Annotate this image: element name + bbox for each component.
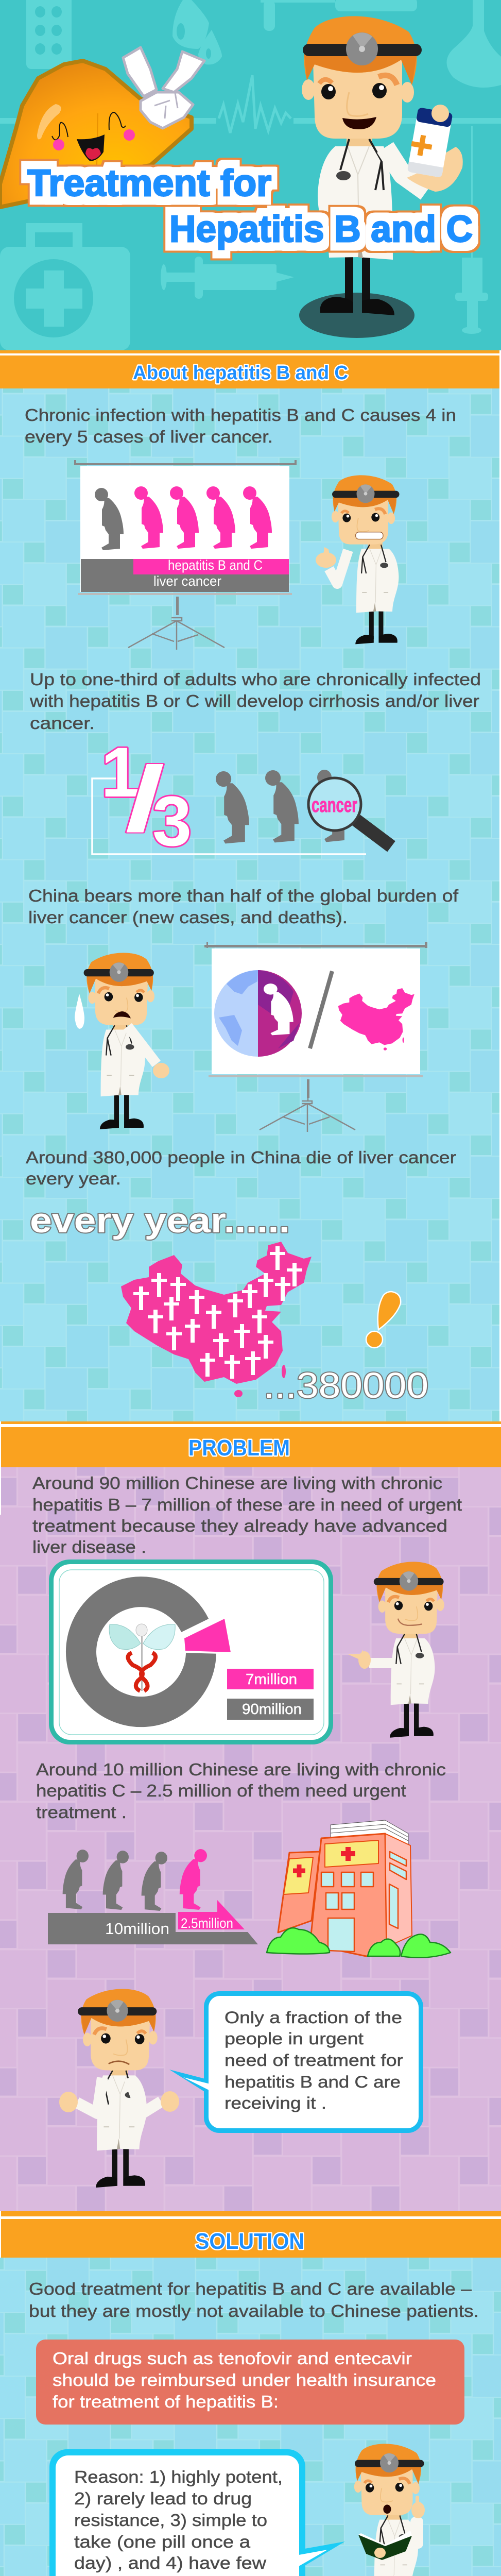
text block: hepatitis B burden: liver disease . xyxy=(32,1537,146,1556)
callout: only a fraction: hepatitis B and C are xyxy=(224,2073,401,2091)
text block: global burden: liver cancer (new cases, and deaths). xyxy=(28,908,348,927)
text block: global burden xyxy=(28,886,459,927)
chart: donut 7 million of 90 million: 90million xyxy=(242,1701,302,1718)
icon: hospital xyxy=(267,1820,451,1958)
callout: only a fraction xyxy=(169,1991,423,2133)
panel: problem xyxy=(0,1467,501,2211)
icon: caduceus xyxy=(109,1624,175,1691)
fraction one third: / xyxy=(125,748,165,850)
text block: hepatitis B burden: hepatitis B – 7 million of these are in need of urgent xyxy=(32,1495,462,1514)
icon: magnifier cancer: cancer xyxy=(312,794,357,817)
map: China with crosses xyxy=(121,1242,312,1397)
heading: About hepatitis B and C xyxy=(0,350,499,388)
text block: 4 in 5 cases: every 5 cases of liver cancer. xyxy=(25,427,273,446)
callout: reasons hepatitis B: 2) rarely lead to drug xyxy=(74,2489,252,2508)
text block: hepatitis C burden: treatment . xyxy=(36,1803,127,1822)
heading: SOLUTION xyxy=(1,2211,501,2258)
text block: one-third of adults: with hepatitis B or C will develop cirrhosis and/or liver xyxy=(29,691,479,710)
fraction one third: 3 xyxy=(152,782,192,861)
text block: one-third of adults: Up to one-third of adults who are chronically infected xyxy=(30,670,481,689)
heading: PROBLEM xyxy=(0,1421,501,1515)
chart: donut 7 million of 90 million: 7million xyxy=(246,1671,297,1688)
callout: reasons hepatitis B: resistance, 3) simple to xyxy=(74,2511,267,2530)
callout: reasons hepatitis B: take (one pill once a xyxy=(74,2532,251,2551)
icon: doctor with thumb up xyxy=(316,475,400,644)
text block: good treatment xyxy=(29,2279,479,2320)
callout: only a fraction: receiving it . xyxy=(224,2094,326,2112)
label: 380000: ...380000 xyxy=(264,1365,428,1405)
callout: reasons hepatitis B: Reason: 1) highly potent, xyxy=(74,2467,283,2486)
text block: global burden: China bears more than half of the global burden of xyxy=(28,886,459,905)
panel: solution xyxy=(0,2258,501,2576)
icon: victory glove xyxy=(123,47,204,128)
title xyxy=(27,163,473,250)
icon: globe half purple xyxy=(214,970,302,1057)
text block: hepatitis B burden: treatment because they already have advanced xyxy=(32,1516,447,1535)
callout: only a fraction: need of treatment for xyxy=(224,2051,403,2070)
icon: pointing doctor xyxy=(348,1562,444,1738)
chart: 10 million and 2.5 million xyxy=(48,1849,258,1944)
callout: reasons hepatitis B: day) , and 4) have few xyxy=(74,2553,266,2572)
text block: one-third of adults xyxy=(29,670,481,733)
callout: oral drugs: Oral drugs such as tenofovir and entecavir xyxy=(53,2349,412,2368)
callout: only a fraction: people in urgent xyxy=(224,2029,364,2048)
title: Treatment for xyxy=(27,163,271,204)
text block: hepatitis C burden: Around 10 million Chinese are living with chronic xyxy=(36,1760,446,1779)
chart: projection screen 4 in 5: liver cancer xyxy=(153,573,221,589)
text block: 380,000 deaths: every year. xyxy=(26,1169,121,1188)
chart: one third with magnifier xyxy=(92,733,391,861)
heading: PROBLEM: PROBLEM xyxy=(188,1435,290,1461)
fraction one third: 1 xyxy=(101,733,140,812)
chart: 10 million and 2.5 million: 2.5million xyxy=(181,1916,233,1931)
icon: smiling liver xyxy=(0,47,204,207)
chart: projection screen 4 in 5: hepatitis B and C xyxy=(168,557,263,573)
callout: oral drugs: should be reimbursed under health insurance xyxy=(53,2370,436,2389)
title: Hepatitis B and C xyxy=(169,209,473,250)
background medical icons xyxy=(0,0,501,350)
text block: hepatitis C burden: hepatitis C – 2.5 million of them need urgent xyxy=(36,1781,406,1800)
chart: projection screen 4 in 5 xyxy=(74,460,297,650)
panel: about hepatitis B and C xyxy=(0,388,499,1421)
text block: 4 in 5 cases: Chronic infection with hepatitis B and C causes 4 in xyxy=(25,405,456,425)
chart: projection screen global share xyxy=(204,942,427,1132)
icon: shrugging doctor xyxy=(59,1989,179,2188)
callout: oral drugs xyxy=(36,2340,464,2425)
text block: hepatitis C burden xyxy=(36,1760,446,1822)
callout: only a fraction: Only a fraction of the xyxy=(224,2008,402,2027)
text block: hepatitis B burden: Around 90 million Chinese are living with chronic xyxy=(32,1473,442,1493)
text block: good treatment: but they are mostly not available to Chinese patients. xyxy=(29,2301,479,2320)
text block: hepatitis B burden xyxy=(32,1473,462,1556)
chart: donut 7 million of 90 million xyxy=(49,1560,333,1744)
icon: doctor holding medicine bottle xyxy=(299,16,463,338)
heading: About hepatitis B and C: About hepatitis B and C xyxy=(133,362,348,384)
heading: SOLUTION: SOLUTION xyxy=(195,2229,304,2254)
chart: 10 million and 2.5 million: 10million xyxy=(105,1920,169,1938)
text block: 380,000 deaths xyxy=(26,1148,456,1188)
icon: worried doctor xyxy=(75,953,169,1129)
icon: exclamation mark xyxy=(366,1292,401,1348)
text block: 380,000 deaths: Around 380,000 people in China die of liver cancer xyxy=(26,1148,456,1167)
callout: oral drugs: for treatment of hepatitis B: xyxy=(53,2392,279,2411)
fraction one third xyxy=(101,733,192,861)
text block: good treatment: Good treatment for hepatitis B and C are available – xyxy=(29,2279,472,2298)
text block: 4 in 5 cases xyxy=(25,405,456,446)
text block: one-third of adults: cancer. xyxy=(30,714,95,733)
icon: doctor with book xyxy=(354,2444,425,2576)
panel: hero banner xyxy=(0,0,501,350)
label: every year: every year...... xyxy=(30,1201,290,1240)
callout: reasons hepatitis B xyxy=(49,2449,345,2576)
icon: magnifier cancer xyxy=(308,778,391,846)
